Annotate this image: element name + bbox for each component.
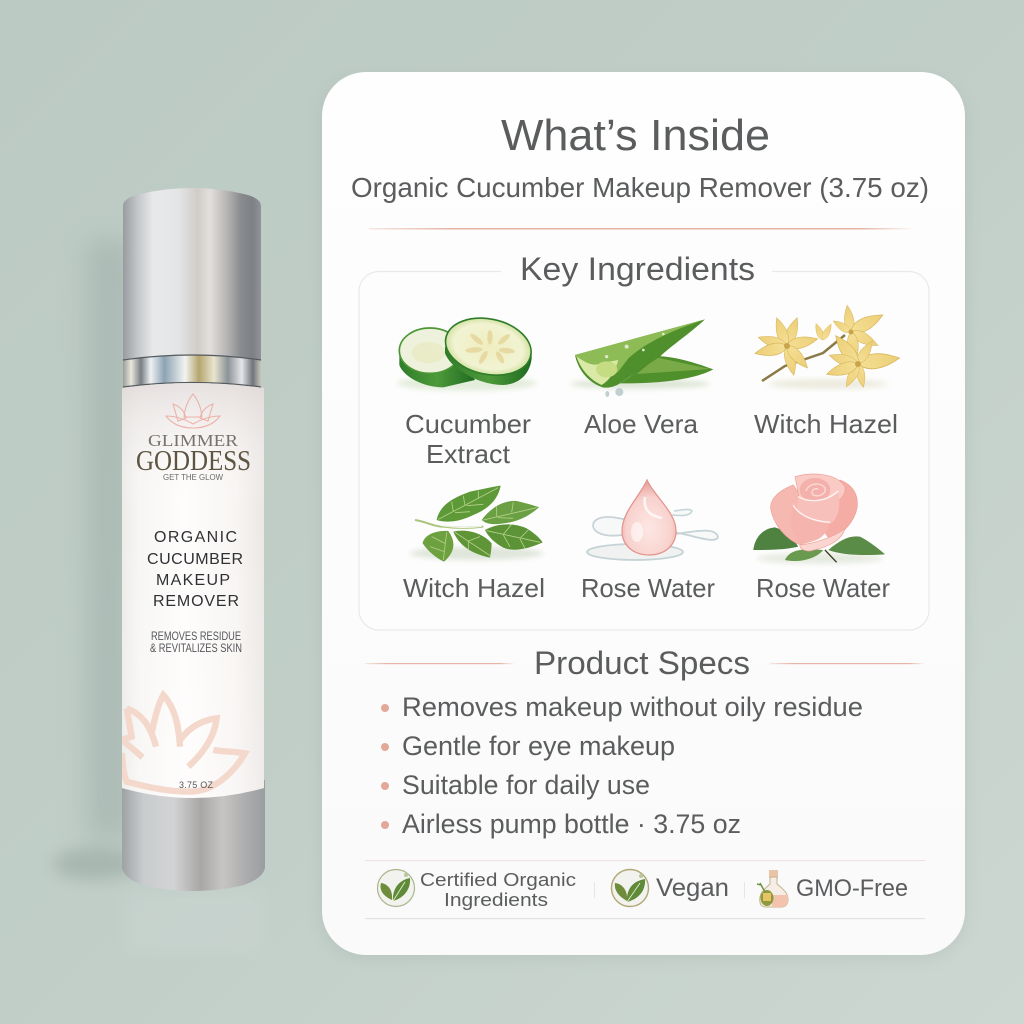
silver cap [123,188,261,362]
product name: MAKEUP [156,572,230,589]
label: cucumber extract [405,409,531,469]
product claim: & REVITALIZES SKIN [150,641,242,655]
chrome collar [123,355,261,388]
key ingredients heading: Key Ingredients [520,251,755,287]
badge: certified organic: Ingredients [444,889,548,910]
brand text: GODDESS [136,446,251,477]
product claim: REMOVES RESIDUE [151,629,241,643]
product name [147,529,243,610]
product bottle [53,188,265,952]
certifications strip [365,860,925,919]
icon: witch hazel flowers [754,305,901,389]
title: What’s Inside [501,112,770,160]
icon: green leaves [410,486,543,562]
icon: water drop [587,480,718,560]
ingredient: aloe vera [570,319,713,439]
badge: gmo-free [757,870,908,907]
card shadow [322,78,965,958]
badge: vegan [612,870,729,906]
spec: removes makeup: Removes makeup without oily residue [402,692,863,722]
brand text: GET THE GLOW [163,473,223,482]
subtitle: Organic Cucumber Makeup Remover (3.75 oz) [351,172,929,203]
brand text [136,431,251,482]
ingredients frame [359,272,929,630]
icon: aloe vera leaf [570,319,713,397]
spec: airless pump: Airless pump bottle · 3.75 oz [402,809,741,839]
ingredient: witch hazel leaves [403,486,545,603]
white label [122,383,264,798]
small lotus logo [166,394,220,428]
label: witch hazel: Witch Hazel [403,573,545,603]
ingredient: witch hazel flower [754,305,901,439]
volume: 3.75 OZ [179,780,214,790]
badge: certified organic [378,869,576,910]
label: rose water: Rose Water [581,573,715,603]
panel: what's inside card [322,72,965,958]
spec: daily use: Suitable for daily use [402,770,650,800]
badge: vegan: Vegan [656,874,729,902]
title divider [369,228,916,230]
panel: product specs [365,645,925,839]
spec: gentle: Gentle for eye makeup [402,731,675,761]
ingredient: cucumber extract [397,311,537,469]
product claim [150,629,242,655]
product name: CUCUMBER [147,551,243,568]
large lotus watermark [122,695,245,792]
label: cucumber extract: Cucumber [405,409,531,439]
silver base [122,780,265,891]
product name: ORGANIC [154,529,237,546]
specs divider right [770,663,925,664]
brand text: GLIMMER [148,431,239,450]
specs heading: Product Specs [534,645,750,681]
floor shadow and reflection [53,848,262,952]
label: rose water: Rose Water [756,573,890,603]
badge: gmo-free: GMO-Free [796,875,908,902]
card background [322,72,965,955]
panel: key ingredients [359,251,929,630]
label: witch hazel: Witch Hazel [754,409,898,439]
bottle shadow [88,240,132,840]
icon: pink rose [753,474,885,564]
badge: certified organic: Certified Organic [420,869,576,890]
ingredient: rose water flower [753,474,890,603]
ingredient: rose water drop [581,480,718,603]
label: aloe vera: Aloe Vera [584,409,699,439]
label: cucumber extract: Extract [426,439,511,469]
specs divider left [365,663,515,664]
product name: REMOVER [153,593,239,610]
icon: cucumber slices [397,311,537,391]
